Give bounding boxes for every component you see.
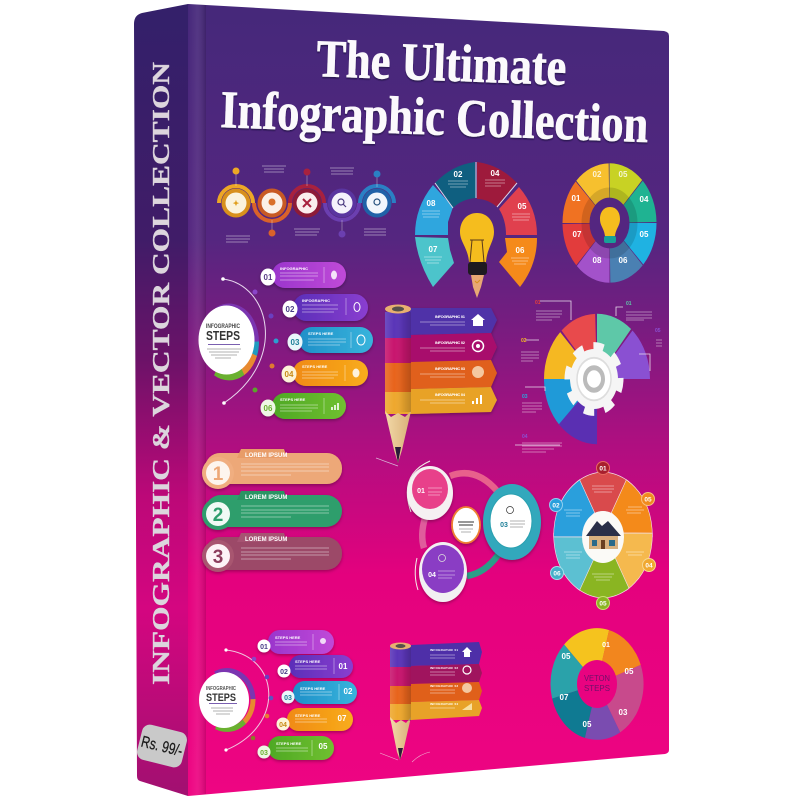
- bulb wheel: [415, 162, 537, 298]
- ribbons: INFOGRAPHIC 01: [435, 314, 466, 319]
- step 2: [258, 188, 286, 218]
- number circles: 02: [552, 502, 560, 510]
- number circles: [550, 462, 656, 610]
- pill 04: 07: [338, 714, 347, 723]
- ribbons: INFOGRAPHIC 01: [430, 648, 458, 652]
- callouts: [515, 300, 662, 452]
- bulb: [460, 213, 494, 298]
- pencil: [380, 642, 430, 762]
- pill 01: 01: [260, 644, 268, 651]
- pill 01: STEPS HERE: [275, 635, 301, 640]
- callouts: 01: [535, 300, 541, 306]
- petal text: [564, 486, 644, 580]
- circle badge: [190, 659, 264, 741]
- ribbons: INFOGRAPHIC 02: [430, 666, 458, 670]
- segment 02: 02: [454, 170, 463, 179]
- ring numbers: 01: [602, 642, 610, 649]
- idea ring: [562, 163, 657, 283]
- pill 01: [260, 262, 346, 288]
- pill 04: [282, 360, 368, 386]
- wave connector: [219, 186, 394, 221]
- ribbons: INFOGRAPHIC 04: [430, 702, 458, 706]
- arc with dots: [221, 277, 278, 405]
- pill 02: STEPS HERE: [295, 659, 321, 664]
- pill 04: 04: [279, 722, 287, 729]
- lorem ipsum ribbons: [202, 449, 342, 572]
- circle badge: STEPS: [206, 328, 240, 343]
- ring numbers: 03: [619, 708, 628, 717]
- pill 05: [258, 736, 334, 760]
- centre label: STEPS: [584, 683, 610, 693]
- ribbons: [410, 308, 497, 414]
- ring numbers: 07: [560, 693, 569, 702]
- number circles: 05: [644, 496, 652, 504]
- pill 01: 01: [264, 273, 273, 282]
- ring segments: [562, 163, 657, 283]
- small bulb: [600, 207, 620, 236]
- ribbon 1: [202, 449, 342, 489]
- node 04: 04: [428, 572, 436, 579]
- segment 04: 04: [491, 169, 500, 178]
- spine title: INFOGRAPHIC & VECTOR COLLECTION: [149, 61, 175, 685]
- ring numbers: [572, 170, 649, 265]
- ribbons: INFOGRAPHIC 02: [435, 340, 466, 345]
- ring numbers: 07: [573, 230, 582, 239]
- ring numbers: [560, 642, 634, 729]
- ribbon 2: LOREM IPSUM: [245, 495, 287, 501]
- house flower: [547, 462, 659, 610]
- pill 03: STEPS HERE: [308, 331, 334, 336]
- pill 05: 05: [319, 742, 328, 751]
- price tag: [135, 723, 189, 769]
- pill 05: STEPS HERE: [276, 741, 302, 746]
- circle badge: INFOGRAPHIC: [206, 686, 236, 692]
- gear: [568, 346, 620, 412]
- ribbon 2: 2: [213, 505, 223, 526]
- cycle diagram: [407, 461, 541, 602]
- pill 06: STEPS HERE: [280, 397, 306, 402]
- pill 06: [260, 393, 346, 419]
- callouts: 04: [522, 434, 528, 440]
- callouts: 03: [522, 394, 528, 400]
- ring numbers: 05: [562, 652, 571, 661]
- pill 04: [276, 708, 353, 731]
- ring segments: [550, 628, 644, 740]
- ring numbers: 04: [640, 195, 649, 204]
- node 04: [419, 542, 467, 602]
- pill 02: [282, 294, 368, 321]
- segment 07: 07: [429, 245, 438, 254]
- ribbon 1: 1: [213, 464, 224, 485]
- pill 02: INFOGRAPHIC: [302, 298, 330, 303]
- segment 08: 08: [427, 199, 436, 208]
- ring numbers: 05: [619, 170, 628, 179]
- pencil: [376, 304, 411, 466]
- node 03: 03: [500, 522, 508, 529]
- pill 05: 03: [260, 750, 268, 757]
- pencil chart top: [376, 304, 497, 466]
- pill 03: STEPS HERE: [300, 686, 326, 691]
- ribbons: [411, 642, 482, 720]
- connector arcs: [407, 461, 498, 590]
- pill 01: [258, 630, 334, 654]
- price tag: Rs. 99/-: [139, 734, 184, 760]
- number circles: 06: [553, 570, 561, 578]
- ribbon 1: LOREM IPSUM: [245, 453, 287, 459]
- pill 03: [288, 327, 373, 353]
- callouts: 01: [626, 301, 632, 307]
- title: [220, 30, 649, 154]
- ring numbers: 05: [625, 667, 634, 676]
- arc with dots: [224, 648, 273, 752]
- ring numbers: 02: [593, 170, 602, 179]
- small bulb base: [604, 236, 616, 243]
- hinge: [188, 4, 206, 796]
- pill 03: 03: [284, 695, 292, 702]
- ring numbers: 01: [572, 194, 581, 203]
- pill 02: 02: [280, 669, 288, 676]
- callouts: 02: [521, 338, 527, 344]
- pill 02: 01: [339, 662, 348, 671]
- node 03: [483, 484, 541, 560]
- ring numbers: 05: [640, 230, 649, 239]
- gear segments: [550, 322, 644, 436]
- ribbons: INFOGRAPHIC 04: [435, 392, 466, 397]
- pill 03: 02: [344, 687, 353, 696]
- infographic steps top: [192, 262, 373, 419]
- ribbon 3: [202, 533, 342, 572]
- book: [134, 4, 669, 796]
- circle badge: [192, 295, 266, 389]
- pill 06: 06: [264, 404, 273, 413]
- circle badge: STEPS: [206, 692, 236, 704]
- infographic steps bottom: [190, 630, 357, 760]
- pill 02: [278, 655, 353, 678]
- centre label: VETON: [584, 673, 610, 683]
- ribbon 2: [202, 491, 342, 530]
- ribbons: INFOGRAPHIC 03: [430, 684, 458, 688]
- step 5: [362, 188, 392, 218]
- pill 02: 02: [286, 305, 295, 314]
- pill 04: 04: [285, 370, 294, 379]
- title: Infographic Collection: [220, 81, 649, 154]
- centre label: [584, 673, 610, 693]
- step 3: [292, 188, 322, 218]
- number circles: 04: [645, 562, 653, 570]
- step 4: [328, 188, 356, 218]
- house centre: [582, 511, 624, 563]
- node 01: 01: [417, 488, 425, 495]
- pill 03: [282, 681, 357, 704]
- number circles: 05: [599, 600, 607, 608]
- petals: [547, 472, 659, 598]
- node 01: [407, 466, 453, 520]
- ring numbers: 08: [593, 256, 602, 265]
- pill 03: 03: [291, 338, 300, 347]
- veton steps ring: [550, 628, 644, 740]
- segment 05: 05: [518, 202, 527, 211]
- ribbon 3: LOREM IPSUM: [245, 537, 287, 543]
- step 1: ✦: [233, 199, 240, 208]
- timeline infographic: [219, 166, 394, 242]
- spine: [134, 4, 188, 796]
- ring numbers: 05: [583, 720, 592, 729]
- segment 06: 06: [516, 246, 525, 255]
- circle badge: INFOGRAPHIC: [206, 324, 241, 330]
- front cover: [188, 4, 669, 796]
- node centre: [452, 507, 480, 543]
- gear chart: [515, 300, 662, 452]
- ring numbers: 06: [619, 256, 628, 265]
- pencil chart bottom: [380, 642, 482, 762]
- ribbon 3: 3: [213, 547, 223, 568]
- step 1: [222, 188, 250, 218]
- pill 01: INFOGRAPHIC: [280, 266, 308, 271]
- pill 04: STEPS HERE: [302, 364, 328, 369]
- title: The Ultimate: [316, 30, 567, 97]
- pill 04: STEPS HERE: [295, 713, 321, 718]
- ribbons: INFOGRAPHIC 03: [435, 366, 466, 371]
- callouts: 05: [655, 328, 661, 334]
- number circles: 01: [599, 466, 607, 472]
